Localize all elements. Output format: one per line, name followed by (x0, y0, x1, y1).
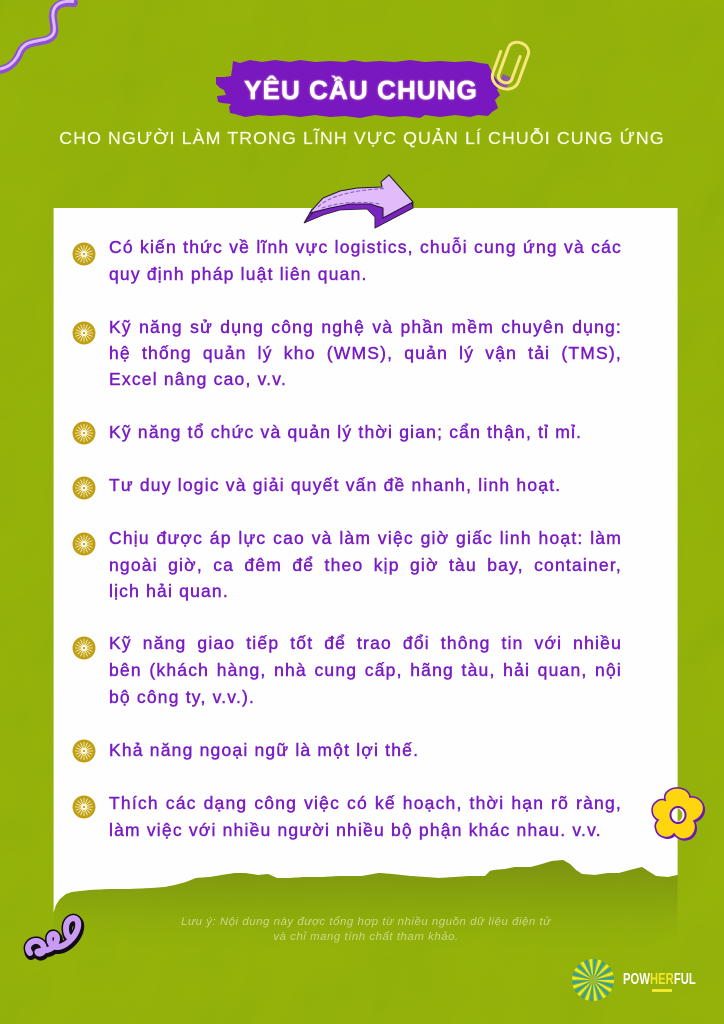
panel: white content card (54, 208, 678, 916)
icon: sun bullet (72, 242, 96, 266)
icon: paperclip (490, 40, 530, 91)
list item 7 (72, 740, 419, 762)
icon: sun bullet (72, 796, 96, 818)
text: ngoài giờ, ca đêm để theo kịp giờ tàu bay, container, (109, 555, 622, 575)
list item 1 (72, 237, 622, 284)
text: bộ công ty, v.v.). (109, 687, 255, 707)
list item 2 (72, 317, 622, 389)
text: Thích các dạng công việc có kế hoạch, thời hạn rõ ràng, (109, 793, 622, 813)
text: Chịu được áp lực cao và làm việc giờ giấc linh hoạt: làm (109, 528, 622, 548)
text (109, 793, 622, 840)
icon: sunburst (572, 959, 614, 1001)
text: Có kiến thức về lĩnh vực logistics, chuỗi cung ứng và các (109, 237, 622, 257)
icon: yellow flower (651, 787, 706, 841)
list item 6 (72, 633, 622, 707)
text: Tư duy logic và giải quyết vấn đề nhanh, linh hoạt. (109, 475, 561, 495)
list item 4 (72, 475, 561, 500)
list item 8 (72, 793, 622, 840)
icon: sun bullet (72, 636, 96, 660)
icon: lilac curl (24, 914, 84, 961)
footnote: Lưu ý: Nội dung này được tổng hợp từ nhiều nguồn dữ liệu điện tử (181, 916, 551, 928)
wordmark: POWHERFUL (623, 971, 696, 988)
text: lịch hải quan. (109, 581, 229, 601)
text: Kỹ năng sử dụng công nghệ và phần mềm chuyên dụng: (109, 317, 622, 337)
decoration: purple squiggle (0, 0, 78, 74)
list item 3 (72, 422, 582, 444)
icon: sun bullet (72, 740, 96, 762)
list item 5 (72, 528, 622, 601)
text: Excel nâng cao, v.v. (109, 369, 287, 389)
footnote (181, 916, 552, 943)
icon: sun bullet (72, 322, 96, 344)
heading: YÊU CẦU CHUNG (244, 75, 478, 105)
text: Kỹ năng giao tiếp tốt để trao đổi thông tin với nhiều (109, 633, 622, 653)
footnote: và chỉ mang tính chất tham khảo. (273, 931, 459, 943)
wordmark underline (652, 989, 672, 992)
text: bên (khách hàng, nhà cung cấp, hãng tàu, hải quan, nội (109, 660, 622, 680)
text (109, 317, 622, 389)
text: Kỹ năng tổ chức và quản lý thời gian; cẩn thận, tỉ mỉ. (109, 422, 582, 442)
icon: lilac arrow (304, 174, 414, 229)
brush stroke background (216, 60, 500, 118)
text: quy định pháp luật liên quan. (109, 264, 368, 284)
text (109, 237, 622, 284)
text (109, 528, 622, 601)
text: hệ thống quản lý kho (WMS), quản lý vận tải (TMS), (109, 343, 622, 363)
icon: sun bullet (72, 422, 96, 444)
text: làm việc với nhiều người nhiều bộ phận khác nhau. v.v. (109, 820, 602, 840)
logo (572, 959, 696, 1001)
icon: sun bullet (72, 532, 96, 556)
text: Khả năng ngoại ngữ là một lợi thế. (109, 740, 419, 760)
icon: sun bullet (72, 476, 96, 500)
text (109, 633, 622, 707)
title banner (216, 40, 530, 118)
subtitle: CHO NGƯỜI LÀM TRONG LĨNH VỰC QUẢN LÍ CHUỖI CUNG ỨNG (59, 128, 665, 148)
